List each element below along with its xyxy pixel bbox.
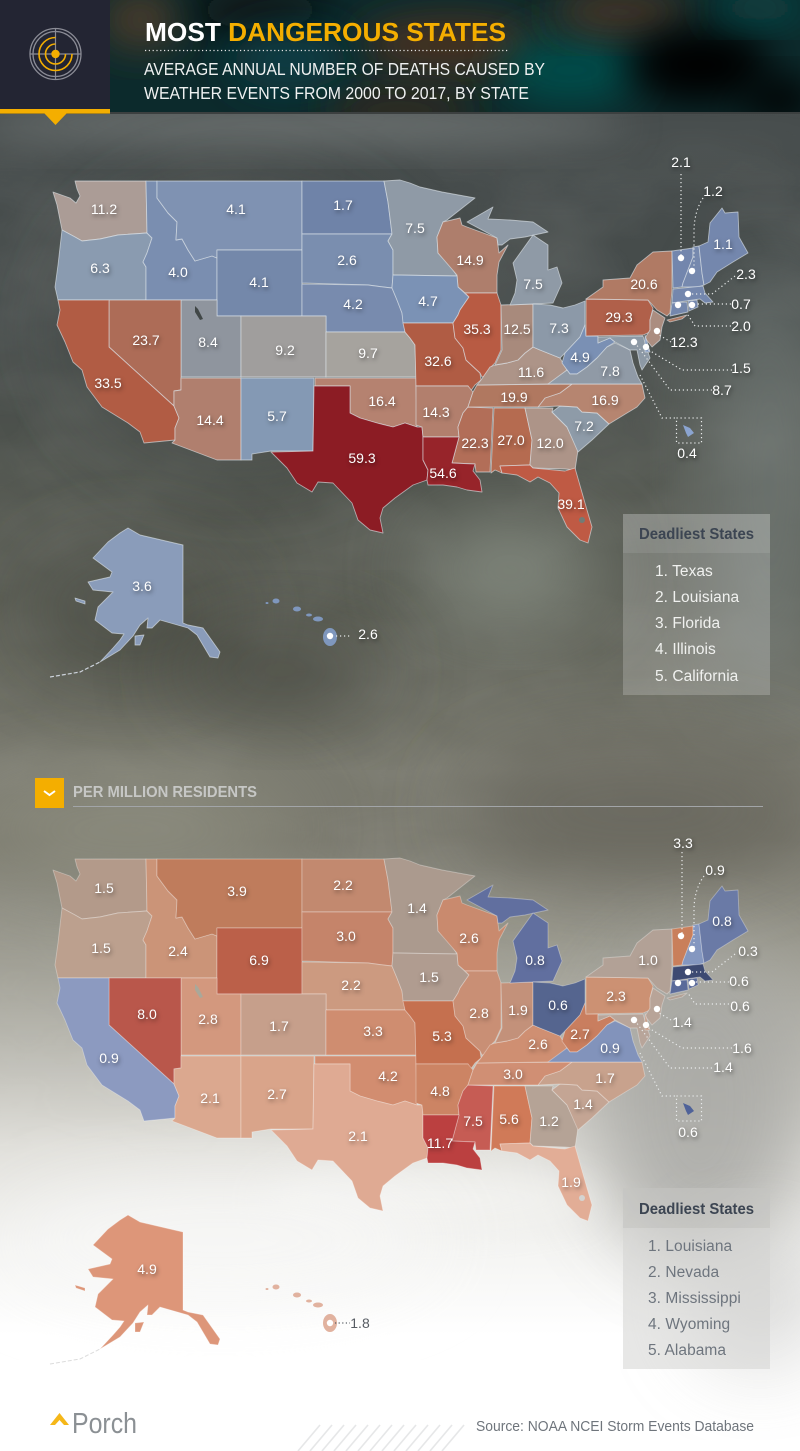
state: Missouri: 32.6 <box>424 353 452 369</box>
state: North Carolina <box>538 1062 645 1102</box>
state: Nebraska: 2.2 <box>341 977 361 993</box>
panel: deadliest states (per million) <box>623 1188 770 1369</box>
callout values <box>670 154 756 461</box>
section heading: per million residents: PER MILLION RESIDENTS <box>73 784 257 801</box>
state: New Mexico <box>241 1056 314 1138</box>
state: Montana <box>157 181 302 261</box>
state: Tennessee <box>468 384 572 407</box>
state: Indiana <box>495 304 533 365</box>
state: Wisconsin <box>437 218 508 293</box>
state: Indiana: 12.5 <box>503 321 531 337</box>
state: Iowa <box>392 953 469 1001</box>
map: deaths per million residents <box>50 835 758 1364</box>
source: Source: NOAA NCEI Storm Events Database <box>476 1418 754 1435</box>
list of states: 4. Illinois <box>655 641 716 658</box>
state: Maine <box>699 208 748 285</box>
state: Tennessee: 3.0 <box>503 1066 523 1082</box>
state: Oregon <box>55 230 152 300</box>
state: California: 33.5 <box>94 375 122 391</box>
state: Nevada: 8.0 <box>137 1006 157 1022</box>
state: Pennsylvania: 2.3 <box>606 988 626 1004</box>
state: Connecticut <box>670 980 688 994</box>
state: Minnesota <box>384 180 475 276</box>
state: Vermont <box>672 926 693 966</box>
state: New York: 20.6 <box>630 276 658 292</box>
state: Vermont <box>672 248 693 288</box>
callout dots <box>631 933 695 1028</box>
logo: Porch <box>50 1408 137 1440</box>
state: Ohio <box>533 979 585 1036</box>
state: South Dakota: 2.6 <box>337 252 357 268</box>
state: Oklahoma: 16.4 <box>368 393 396 409</box>
state: Illinois <box>453 293 501 377</box>
state: Alabama: 27.0 <box>497 432 525 448</box>
state: Hawaii <box>266 598 337 646</box>
state: Washington: 11.2 <box>91 201 117 217</box>
state: New York <box>586 251 687 322</box>
list of states: 4. Wyoming <box>648 1316 730 1333</box>
icon: radar target <box>30 28 81 80</box>
state: Arkansas <box>416 386 473 437</box>
callout values: 0.6 <box>730 998 750 1014</box>
callout values: 1.2 <box>703 183 723 199</box>
icon panel <box>0 0 110 125</box>
state: Utah <box>181 300 241 377</box>
state: Tennessee <box>468 1062 572 1085</box>
state: North Dakota: 1.7 <box>333 197 353 213</box>
state: Oklahoma <box>315 378 417 427</box>
state: Colorado: 1.7 <box>269 1018 289 1034</box>
state: New Jersey <box>645 988 665 1025</box>
subtitle: AVERAGE ANNUAL NUMBER OF DEATHS CAUSED BY <box>144 59 545 79</box>
state: Pennsylvania <box>586 977 653 1014</box>
state: Alaska: 3.6 <box>132 578 152 594</box>
state: Kansas: 9.7 <box>358 345 378 361</box>
list of states: 1. Louisiana <box>648 1238 733 1255</box>
state: Maine: 1.1 <box>713 236 733 252</box>
state: California: 0.9 <box>99 1050 119 1066</box>
callout values: 1.4 <box>713 1059 733 1075</box>
state: Minnesota <box>384 858 475 954</box>
logo: Porch: Porch <box>72 1408 137 1440</box>
state: Massachusetts <box>672 964 713 981</box>
state: Washington: 1.5 <box>94 880 114 896</box>
icon: chevron <box>44 791 55 795</box>
state: Florida: 1.9 <box>561 1174 581 1190</box>
callout values: 0.7 <box>731 296 751 312</box>
state: Oregon <box>55 908 152 978</box>
footer hatch <box>298 1425 464 1451</box>
state: Mississippi <box>452 407 493 472</box>
state: Missouri <box>403 1001 481 1070</box>
state: Delaware <box>645 1013 650 1030</box>
state: Georgia <box>525 1086 578 1148</box>
state: Texas <box>271 1064 428 1211</box>
state: South Carolina <box>552 1084 609 1130</box>
panel: deadliest states (total) <box>623 514 770 695</box>
state: Kentucky <box>477 347 567 385</box>
state: Kansas: 3.3 <box>363 1023 383 1039</box>
state: South Carolina <box>552 406 609 452</box>
list of states: 2. Nevada <box>648 1264 719 1281</box>
list of states <box>648 1238 741 1359</box>
state: Nebraska <box>302 962 405 1010</box>
state: Georgia: 1.2 <box>539 1113 559 1129</box>
state: South Dakota: 3.0 <box>336 928 356 944</box>
state: California <box>57 300 179 443</box>
state: Arizona: 2.1 <box>200 1090 220 1106</box>
state: North Dakota: 2.2 <box>333 877 353 893</box>
state: Ohio <box>533 301 585 358</box>
callout values: 0.6 <box>729 973 749 989</box>
state: Iowa <box>392 275 469 323</box>
state: Michigan: 0.8 <box>525 952 545 968</box>
state: Nebraska <box>302 284 405 332</box>
state: Nevada: 23.7 <box>132 332 160 348</box>
state: Delaware <box>645 335 650 352</box>
list of states: 5. California <box>655 668 739 685</box>
state: Arizona: 14.4 <box>196 412 224 428</box>
state: Wisconsin: 2.6 <box>459 930 479 946</box>
state: Idaho: 2.4 <box>168 943 188 959</box>
map: total deaths by state <box>50 154 756 677</box>
state: North Dakota <box>302 859 392 912</box>
state: West Virginia: 2.7 <box>570 1026 590 1042</box>
state: Colorado <box>241 316 326 377</box>
state: Utah: 8.4 <box>198 334 218 350</box>
state: Alabama <box>491 1086 532 1151</box>
state: Pennsylvania <box>586 299 653 336</box>
list of states: 3. Mississippi <box>648 1290 741 1307</box>
state: Kentucky <box>477 1025 567 1063</box>
state: Virginia: 0.9 <box>600 1040 620 1056</box>
state: Michigan <box>467 207 562 305</box>
panel heading: Deadliest States <box>639 526 754 543</box>
state: Washington <box>53 859 147 919</box>
title: MOST DANGEROUS STATES <box>145 19 506 47</box>
state: Alaska: 4.9 <box>137 1261 157 1277</box>
state: Wisconsin <box>437 896 508 971</box>
state: Maine: 0.8 <box>712 913 732 929</box>
state: Mississippi: 7.5 <box>463 1113 483 1129</box>
state: Missouri: 5.3 <box>432 1028 452 1044</box>
state: Idaho: 4.0 <box>168 264 188 280</box>
state: Nevada <box>109 300 181 406</box>
state: New Mexico <box>241 378 314 460</box>
state: Rhode Island <box>688 978 698 989</box>
list of states <box>655 563 740 685</box>
state: New Hampshire <box>682 924 704 965</box>
state: North Carolina: 1.7 <box>595 1070 615 1086</box>
state: Massachusetts <box>672 286 713 303</box>
callout values: 0.4 <box>677 445 697 461</box>
state: North Carolina <box>538 384 645 424</box>
state: New York <box>586 929 687 1000</box>
state: Iowa: 1.5 <box>419 969 439 985</box>
state: Missouri <box>403 323 481 392</box>
callout values <box>672 835 758 1140</box>
state: Illinois <box>453 971 501 1055</box>
state: Colorado <box>241 994 326 1055</box>
state: Minnesota: 1.4 <box>407 900 427 916</box>
state: Wisconsin: 14.9 <box>456 252 484 268</box>
state: Alabama: 5.6 <box>499 1111 519 1127</box>
state: Arkansas <box>416 1064 473 1115</box>
state: North Dakota <box>302 181 392 234</box>
list of states: 5. Alabama <box>648 1342 726 1359</box>
callout values: 0.6 <box>678 1124 698 1140</box>
state: West Virginia <box>562 1003 615 1052</box>
state: Texas <box>271 386 428 533</box>
state: Georgia <box>525 408 578 470</box>
state: Montana: 4.1 <box>226 201 246 217</box>
callout values: 2.1 <box>671 154 691 170</box>
callout values: 1.4 <box>672 1014 692 1030</box>
state: Iowa: 4.7 <box>418 293 438 309</box>
state: South Dakota <box>302 234 393 288</box>
state: Virginia <box>548 1021 642 1062</box>
state: Wyoming: 4.1 <box>249 274 269 290</box>
list of states: 2. Louisiana <box>655 589 740 606</box>
state: Indiana: 1.9 <box>508 1002 528 1018</box>
state: Pennsylvania: 29.3 <box>605 309 633 325</box>
state: Georgia: 12.0 <box>536 435 564 451</box>
state: Oklahoma: 4.2 <box>378 1068 398 1084</box>
state: Wyoming <box>217 250 302 316</box>
callout leaders <box>636 174 735 443</box>
header band <box>0 0 800 128</box>
state: Arkansas: 14.3 <box>422 404 450 420</box>
state: Oregon: 6.3 <box>90 260 110 276</box>
state: Virginia: 7.8 <box>600 363 620 379</box>
callout values: 12.3 <box>670 334 698 350</box>
state: New York: 1.0 <box>638 952 658 968</box>
panel heading: Deadliest States <box>639 1201 754 1218</box>
state: Ohio: 7.3 <box>549 320 569 336</box>
state: Alabama <box>491 408 532 473</box>
callout dots <box>631 255 695 350</box>
state: Louisiana: 54.6 <box>429 465 457 481</box>
value: Hawaii: 1.8 <box>350 1315 370 1331</box>
state: Kentucky: 11.6 <box>518 364 544 380</box>
state: Texas: 2.1 <box>348 1128 368 1144</box>
state: Florida <box>500 1143 592 1221</box>
state: Louisiana <box>423 1115 482 1170</box>
state: Maryland <box>598 1014 650 1048</box>
callout values: 0.9 <box>705 862 725 878</box>
state: South Dakota <box>302 912 393 966</box>
state: Louisiana <box>423 437 482 492</box>
state: New Mexico: 2.7 <box>267 1086 287 1102</box>
state: New Jersey <box>645 310 665 347</box>
state: Maine <box>699 886 748 963</box>
callout values: 3.3 <box>673 835 693 851</box>
state: South Carolina: 1.4 <box>573 1096 593 1112</box>
state: Indiana <box>495 982 533 1043</box>
state: Maryland <box>598 336 650 370</box>
state: Illinois: 35.3 <box>463 321 491 337</box>
state: Florida <box>500 465 592 543</box>
state: Colorado: 9.2 <box>275 342 295 358</box>
state: West Virginia: 4.9 <box>570 349 590 365</box>
list of states: 1. Texas <box>655 563 713 580</box>
state: West Virginia <box>562 325 615 374</box>
state: Wyoming: 6.9 <box>249 952 269 968</box>
state: Idaho <box>143 859 217 978</box>
callout values: 8.7 <box>712 382 732 398</box>
state: Nebraska: 4.2 <box>343 296 363 312</box>
state: New Mexico: 5.7 <box>267 408 287 424</box>
state: New Hampshire <box>682 246 704 287</box>
state: Wyoming <box>217 928 302 994</box>
callout values: 2.0 <box>731 318 751 334</box>
subtitle <box>144 59 545 103</box>
callout values: 1.5 <box>731 360 751 376</box>
state: Mississippi: 22.3 <box>461 435 489 451</box>
callout values: 0.3 <box>738 943 758 959</box>
state: Arkansas: 4.8 <box>430 1083 450 1099</box>
state: Alaska <box>50 528 220 677</box>
state: North Carolina: 16.9 <box>591 392 619 408</box>
state: Utah <box>181 978 241 1055</box>
state: Arizona <box>172 1056 241 1138</box>
state: Utah: 2.8 <box>198 1011 218 1027</box>
value: Hawaii: 2.6 <box>358 626 378 642</box>
state: Idaho <box>143 181 217 300</box>
state: Minnesota: 7.5 <box>405 220 425 236</box>
state: Florida: 39.1 <box>557 496 585 512</box>
state: Arizona <box>172 378 241 460</box>
state: California <box>57 978 179 1121</box>
section heading: per million residents <box>35 778 763 808</box>
list of states: 3. Florida <box>655 615 720 632</box>
subtitle: WEATHER EVENTS FROM 2000 TO 2017, BY STATE <box>144 83 529 103</box>
state: Montana <box>157 859 302 939</box>
callout values: 1.6 <box>732 1040 752 1056</box>
state: South Carolina: 7.2 <box>574 418 594 434</box>
state: Oregon: 1.5 <box>91 940 111 956</box>
state: Alaska <box>50 1215 220 1364</box>
state: Texas: 59.3 <box>348 450 376 466</box>
state: Kentucky: 2.6 <box>528 1036 548 1052</box>
state: Kansas <box>326 1010 416 1055</box>
state: Virginia <box>548 343 642 384</box>
state: Washington <box>53 181 147 241</box>
state: Connecticut <box>670 302 688 316</box>
state: Oklahoma <box>315 1056 417 1105</box>
callout leaders <box>636 852 735 1121</box>
state: Tennessee: 19.9 <box>500 389 528 405</box>
state: Montana: 3.9 <box>227 883 247 899</box>
state: Nevada <box>109 978 181 1084</box>
state: Ohio: 0.6 <box>548 997 568 1013</box>
state: Rhode Island <box>688 300 698 311</box>
callout values: 2.3 <box>736 266 756 282</box>
state: Kansas <box>326 332 416 377</box>
state: Mississippi <box>452 1085 493 1150</box>
state: Louisiana: 11.7 <box>427 1135 453 1151</box>
state: Illinois: 2.8 <box>469 1005 489 1021</box>
state: Michigan <box>467 885 562 983</box>
state: Hawaii <box>266 1284 337 1332</box>
state: Michigan: 7.5 <box>523 276 543 292</box>
